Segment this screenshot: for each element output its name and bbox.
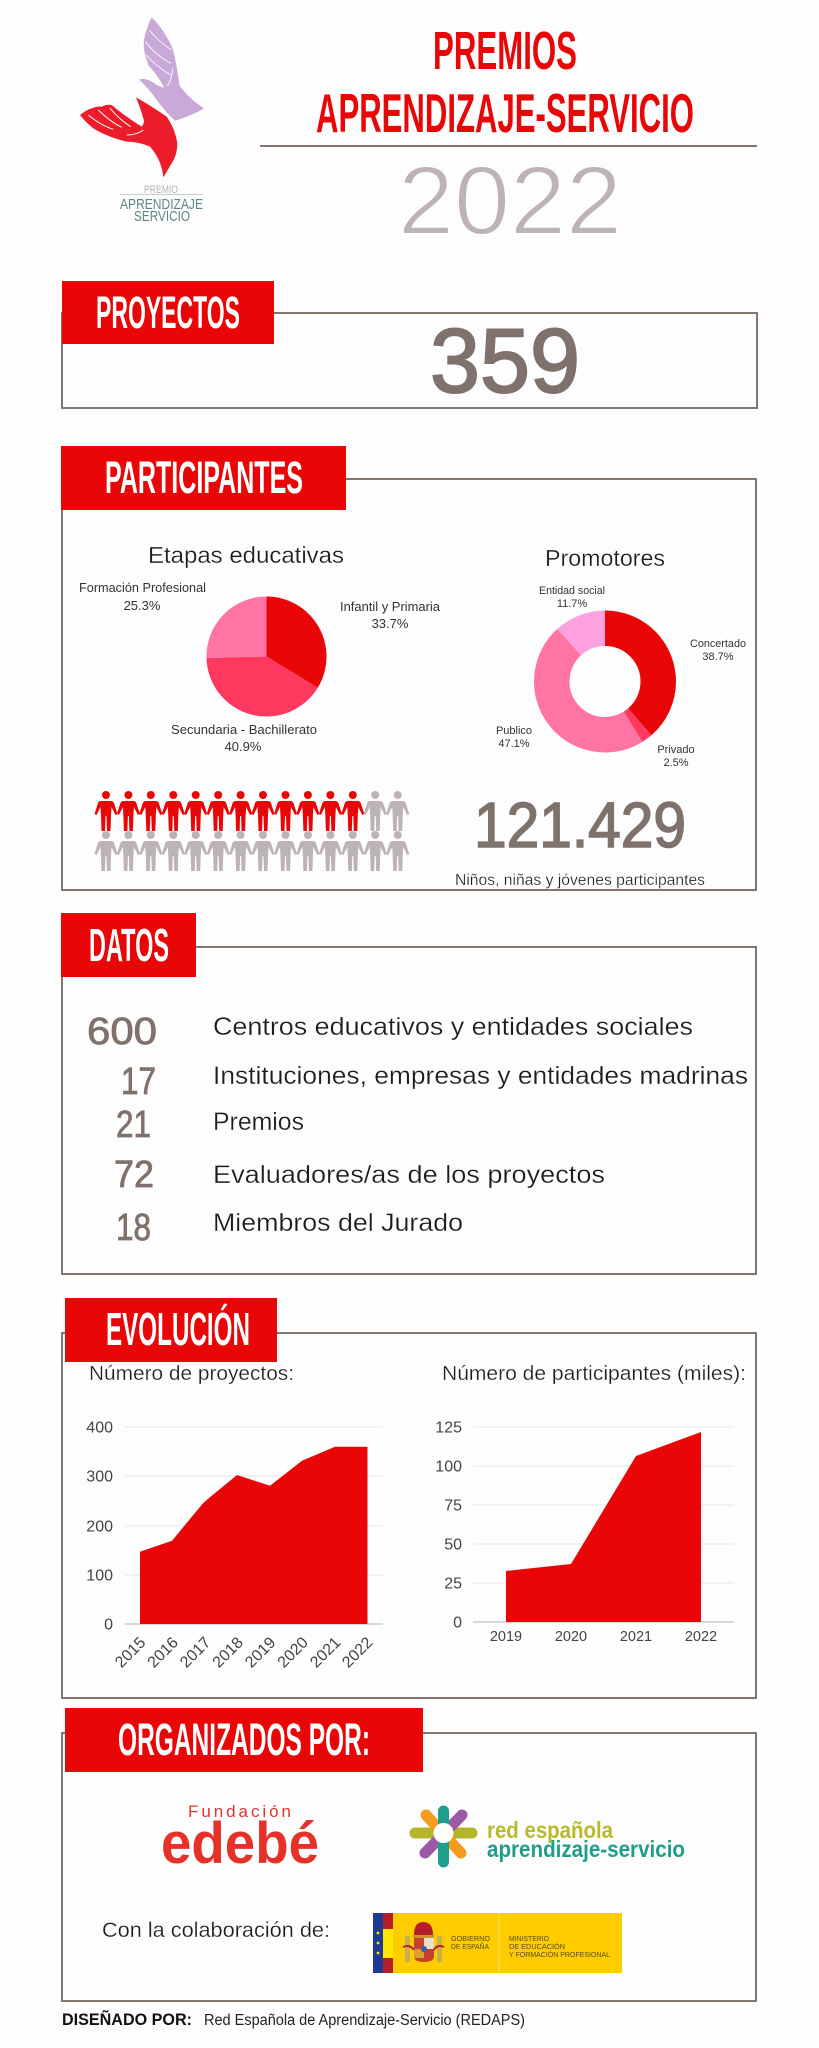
chart title: numero de participantes: Número de participantes (miles): <box>442 1362 746 1385</box>
panel: datos <box>61 913 756 1274</box>
logo: gobierno de espana: DE ESPAÑA <box>451 1942 489 1951</box>
area chart: participantes: 2019 <box>490 1629 522 1645</box>
stat: 72 evaluadores: 72 <box>114 1154 154 1196</box>
heading: proyectos <box>62 281 274 344</box>
text: con la colaboracion de: Con la colaboración de: <box>102 1919 330 1942</box>
text: gobierno de espana: GOBIERNO <box>451 1934 490 1943</box>
label: formacion profesional <box>79 580 206 613</box>
area chart: proyectos: 200 <box>86 1518 113 1536</box>
area chart: participantes: 2020 <box>555 1629 587 1645</box>
label: entidad social <box>539 585 605 610</box>
label: concertado: 38.7% <box>702 651 734 663</box>
area chart: proyectos: 300 <box>86 1468 113 1486</box>
label: secundaria bachillerato: 40.9% <box>225 739 262 754</box>
chart heading: etapas educativas: Etapas educativas <box>148 542 344 568</box>
stat: 18 jurado <box>116 1207 463 1249</box>
logo: red espanola aprendizaje-servicio: aprendizaje-servicio <box>487 1836 685 1862</box>
donut chart: promotores <box>552 628 658 735</box>
area chart: participantes: 2021 <box>620 1629 652 1645</box>
stat: 17 instituciones: 17 <box>121 1061 156 1103</box>
panel: evolucion <box>62 1298 756 1698</box>
logo: Premio Aprendizaje-Servicio <box>80 17 204 225</box>
icon: star <box>415 1811 472 1862</box>
stat: 17 instituciones: Instituciones, empresas y entidades madrinas <box>213 1062 748 1090</box>
area chart: proyectos: 400 <box>86 1420 113 1436</box>
title <box>316 21 694 144</box>
area chart: participantes: 2022 <box>685 1629 717 1645</box>
label: entidad social: Entidad social <box>539 585 605 597</box>
label: concertado <box>690 638 746 663</box>
pictogram: people <box>94 791 409 871</box>
area chart: participantes: 75 <box>444 1498 462 1514</box>
stat: 21 premios: 21 <box>116 1104 151 1146</box>
label: formacion profesional: 25.3% <box>124 598 161 613</box>
icon: lilac hand <box>139 17 204 121</box>
logo: gobierno de espana: Y FORMACIÓN PROFESIONAL <box>509 1950 610 1959</box>
label: concertado: Concertado <box>690 638 746 650</box>
area chart: proyectos: 2018 <box>210 1634 247 1671</box>
caption: participantes: Niños, niñas y jóvenes participantes <box>455 872 705 889</box>
label: infantil y primaria: Infantil y Primaria <box>340 599 441 614</box>
chart heading: promotores: Promotores <box>545 545 665 571</box>
area chart: proyectos: 2019 <box>242 1634 279 1671</box>
logo text: PREMIO: PREMIO <box>144 184 178 196</box>
icon: red hand <box>80 97 177 177</box>
area chart: proyectos <box>86 1420 383 1671</box>
area chart: proyectos: 0 <box>104 1616 113 1634</box>
heading: organizados por: ORGANIZADOS POR: <box>118 1714 370 1765</box>
logo: red espanola aprendizaje-servicio: red española <box>487 1817 613 1843</box>
label: publico: 47.1% <box>498 738 530 750</box>
area chart: proyectos: 2021 <box>307 1634 344 1671</box>
label: privado: 2.5% <box>663 757 689 769</box>
area chart: participantes: 50 <box>444 1536 462 1554</box>
stat: 17 instituciones <box>121 1061 748 1103</box>
panel: participantes <box>61 446 756 890</box>
stat: 18 jurado: Miembros del Jurado <box>213 1209 463 1237</box>
heading: organizados por <box>65 1708 423 1772</box>
number: 359: 359 <box>430 311 580 412</box>
stat: 72 evaluadores: Evaluadores/as de los proyectos <box>213 1161 605 1189</box>
area chart: proyectos: 100 <box>86 1568 113 1584</box>
title line 1: PREMIOS <box>433 21 577 81</box>
heading: proyectos: PROYECTOS <box>96 287 240 338</box>
label: entidad social: 11.7% <box>557 598 587 610</box>
panel: organizados por <box>62 1708 756 2001</box>
label: secundaria bachillerato <box>171 722 317 754</box>
text: ministerio: MINISTERIO <box>509 1934 549 1943</box>
heading: evolucion <box>65 1298 277 1362</box>
heading: evolucion: EVOLUCIÓN <box>106 1303 250 1355</box>
logo text: SERVICIO: SERVICIO <box>134 209 190 225</box>
heading: participantes <box>61 446 346 510</box>
heading: datos: DATOS <box>89 919 169 971</box>
pie chart: etapas educativas <box>206 596 327 717</box>
label: infantil y primaria <box>340 599 441 631</box>
heading: datos <box>61 913 196 977</box>
logo: red espanola aprendizaje-servicio <box>415 1811 685 1862</box>
chart title: numero de proyectos: Número de proyectos: <box>89 1362 294 1385</box>
number: 121.429: 121.429 <box>474 789 686 861</box>
area chart: proyectos: 2022 <box>339 1634 376 1671</box>
icon: coat of arms <box>403 1922 444 1962</box>
label: infantil y primaria: 33.7% <box>372 616 409 631</box>
stat: 600 centros: Centros educativos y entidades sociales <box>213 1013 693 1041</box>
stat: 600 centros <box>87 1011 693 1053</box>
year 2022: 2022 <box>398 146 622 255</box>
footer: disenado por: DISEÑADO POR: <box>62 2009 192 2029</box>
label: publico <box>496 725 532 750</box>
area chart: proyectos: 2020 <box>275 1634 312 1671</box>
stat: 18 jurado: 18 <box>116 1207 151 1249</box>
area chart: participantes: 25 <box>444 1576 462 1592</box>
panel: proyectos <box>62 281 757 412</box>
heading: participantes: PARTICIPANTES <box>105 452 303 503</box>
logo: fundacion edebe: edebé <box>161 1811 319 1876</box>
area chart: proyectos: 2016 <box>145 1634 182 1671</box>
area chart: participantes <box>435 1420 734 1645</box>
area chart: participantes: 100 <box>435 1458 462 1476</box>
area chart: proyectos: 2015 <box>112 1634 149 1671</box>
area chart: participantes: 125 <box>435 1420 462 1436</box>
logo: fundacion edebe: Fundación <box>188 1802 291 1821</box>
logo: gobierno de espana <box>373 1913 622 1973</box>
label: privado: Privado <box>657 744 695 756</box>
label: privado <box>657 744 695 769</box>
stat: 72 evaluadores <box>114 1154 605 1196</box>
stat: 600 centros: 600 <box>87 1011 157 1053</box>
logo: gobierno de espana: DE EDUCACIÓN <box>509 1942 565 1951</box>
logo text: APRENDIZAJE: APRENDIZAJE <box>120 197 203 213</box>
stat: 21 premios <box>116 1104 304 1146</box>
footer: disenado por: Red Española de Aprendizaje-Servicio (REDAPS) <box>204 2012 525 2029</box>
area chart: participantes: 0 <box>453 1614 462 1632</box>
label: formacion profesional: Formación Profesional <box>79 580 206 595</box>
area chart: proyectos: 2017 <box>177 1634 214 1671</box>
stat: 21 premios: Premios <box>213 1108 304 1136</box>
footer: disenado por <box>62 2009 525 2029</box>
label: secundaria bachillerato: Secundaria - Bachillerato <box>171 722 317 737</box>
label: publico: Publico <box>496 725 532 737</box>
